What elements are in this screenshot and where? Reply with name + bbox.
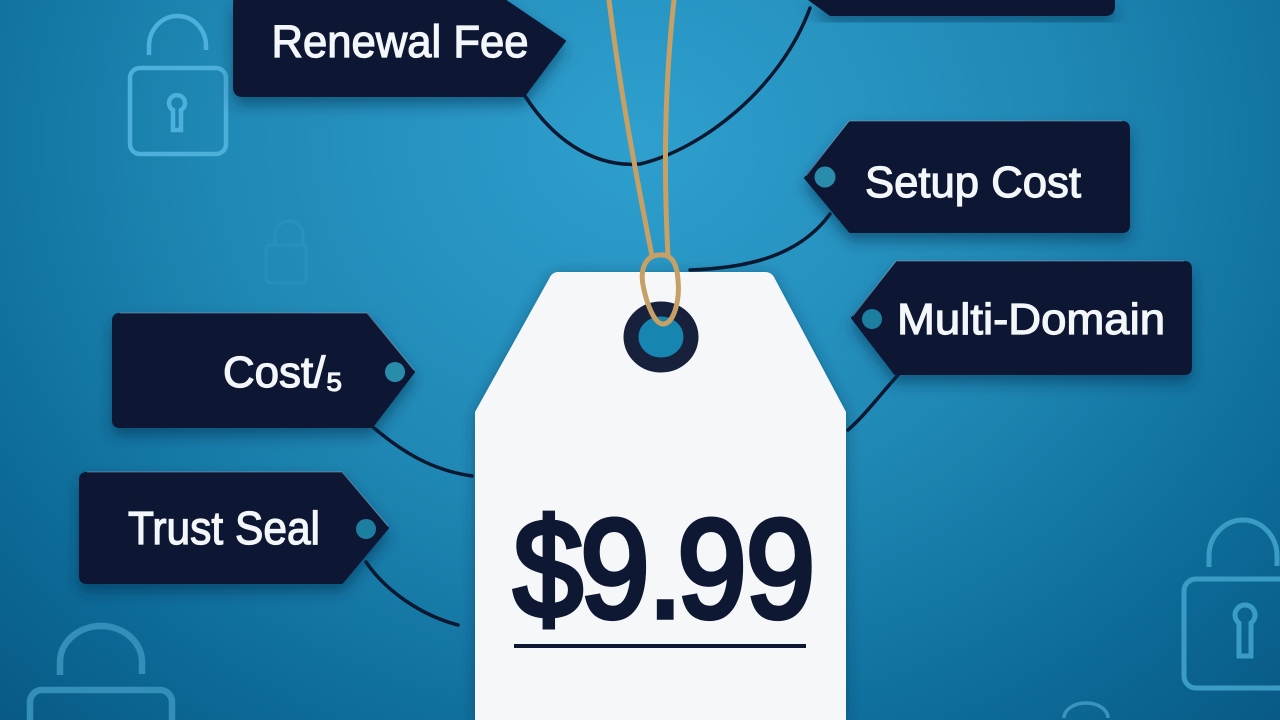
tag: Trust Seal: Trust Seal <box>128 502 320 554</box>
price: $9.99 <box>514 491 815 648</box>
tag body <box>475 272 846 720</box>
tag: Renewal Fee <box>234 1 565 96</box>
tag: Setup Cost: Setup Cost <box>865 158 1081 207</box>
tag: Cost: Cost/₅ <box>223 348 343 397</box>
icon: padlock bottom left <box>30 626 172 720</box>
tag: Cost <box>113 313 414 427</box>
icon: padlock bottom right <box>1184 520 1280 688</box>
icon: padlock top left <box>130 16 226 154</box>
icon: faint padlock center <box>266 221 306 283</box>
tag: Multi-Domain <box>852 261 1191 374</box>
price tag <box>475 272 846 720</box>
connector strings <box>366 8 898 625</box>
tag: Multi-Domain: Multi-Domain <box>897 295 1165 344</box>
tag: Setup Cost <box>805 121 1129 232</box>
tag: Renewal Fee: Renewal Fee <box>272 16 528 67</box>
eyelet <box>631 309 691 365</box>
underline <box>514 644 806 648</box>
tag: top right partial <box>808 0 1115 16</box>
icon: padlock bottom center <box>1064 703 1108 718</box>
tag: Trust Seal <box>80 472 388 583</box>
twine <box>609 0 678 324</box>
